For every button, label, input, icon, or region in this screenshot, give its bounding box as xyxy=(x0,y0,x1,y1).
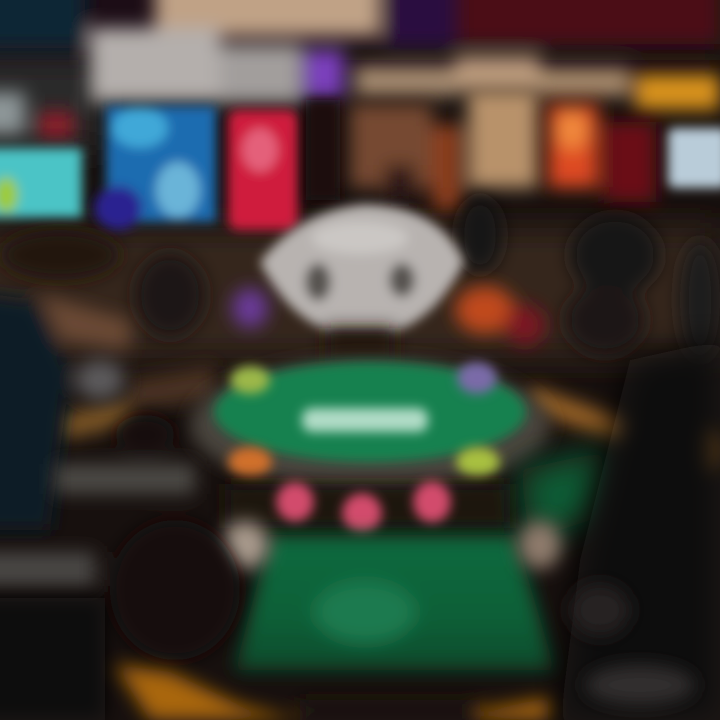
white central dealer shape xyxy=(260,204,464,332)
left cyan screen xyxy=(0,148,82,218)
dark gap between banners xyxy=(306,100,340,200)
blue panel xyxy=(94,106,216,230)
table rail wings xyxy=(55,365,720,472)
room floor and mid background xyxy=(0,0,720,358)
brown standing figures xyxy=(350,90,538,210)
bottom left black figure xyxy=(0,598,105,720)
orange banner xyxy=(548,104,656,202)
top wall signs xyxy=(0,0,720,138)
right white screen xyxy=(668,128,720,188)
grey table rail xyxy=(190,359,550,491)
felt corner chips xyxy=(228,362,500,477)
right black figures xyxy=(560,340,720,720)
left dark figure xyxy=(0,290,130,530)
green upper table felt xyxy=(214,362,526,462)
hands on table xyxy=(221,521,562,569)
orange table rail bottom xyxy=(115,665,548,720)
grey crowd at left xyxy=(0,415,240,660)
grey right crowd xyxy=(570,584,695,705)
small coloured chips around dealer xyxy=(232,286,545,345)
right green table edge xyxy=(520,450,610,540)
table logo blurred white xyxy=(302,408,428,432)
dark band with pink chips xyxy=(225,481,510,533)
green lower table felt xyxy=(235,535,555,670)
red banner xyxy=(228,110,298,230)
crowd heads upper right xyxy=(0,197,720,360)
dark neck below white shape xyxy=(325,328,395,364)
